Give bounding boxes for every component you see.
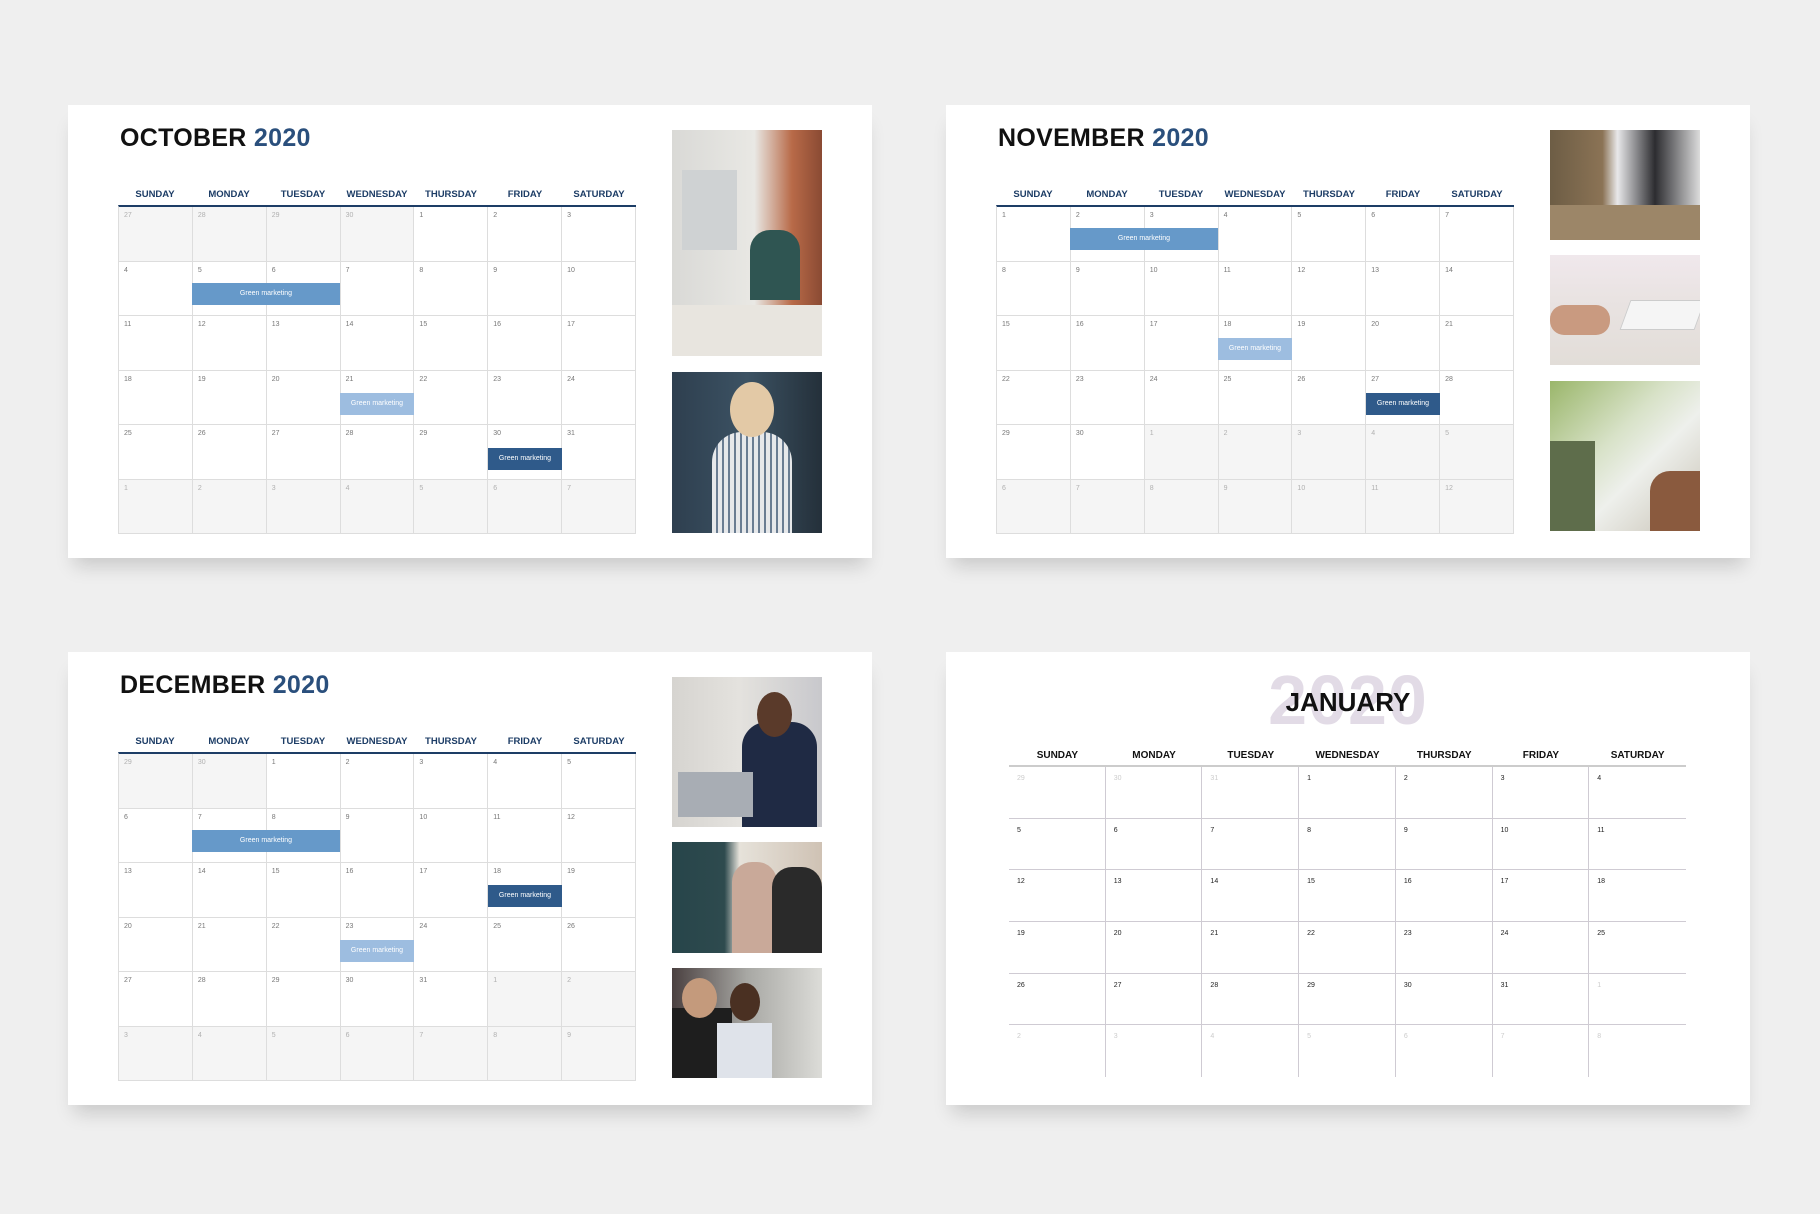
calendar grid: october: 3 — [567, 212, 571, 219]
calendar grid: november: 8 — [1002, 266, 1006, 274]
calendar grid: january: 18 — [1597, 878, 1605, 885]
event bar: nov 2-3 — [1070, 228, 1218, 250]
day headers — [1013, 189, 1503, 200]
calendar grid: october: 9 — [493, 266, 497, 274]
calendar grid: december: 30 — [198, 759, 206, 766]
calendar grid: november: 9 — [1224, 484, 1227, 492]
calendar grid: october: 20 — [272, 376, 280, 382]
calendar grid: november: 4 — [1224, 212, 1227, 219]
title: january: JANUARY — [1286, 687, 1410, 717]
calendar grid: november: 23 — [1076, 376, 1084, 382]
calendar grid: december: 24 — [419, 922, 427, 930]
calendar grid: november: 10 — [1297, 484, 1305, 492]
calendar grid: november: 12 — [1297, 266, 1305, 274]
calendar grid: october: 25 — [124, 430, 132, 437]
calendar grid: january: 26 — [1017, 982, 1025, 989]
calendar grid: november: 6 — [1371, 212, 1375, 219]
calendar grid: january: 2 — [1404, 775, 1408, 782]
event bar: dec 23: Green marketing — [351, 947, 403, 954]
photo: hands on keyboard — [1550, 255, 1700, 365]
day headers: SATURDAY — [1451, 189, 1503, 200]
calendar grid: december: 21 — [198, 922, 206, 930]
day headers: TUESDAY — [1227, 750, 1274, 761]
calendar grid: january: 30 — [1114, 775, 1122, 782]
calendar grid: december: 29 — [124, 759, 132, 766]
calendar grid: january: 7 — [1210, 827, 1214, 834]
day headers: FRIDAY — [1386, 189, 1420, 200]
calendar grid: november: 28 — [1445, 376, 1453, 382]
calendar grid: october: 6 — [272, 266, 276, 274]
calendar grid: october: 14 — [346, 321, 353, 328]
calendar grid: december: 25 — [493, 922, 501, 930]
day headers: WEDNESDAY — [347, 736, 407, 747]
calendar grid: november: 20 — [1371, 321, 1379, 328]
calendar grid: january — [1009, 765, 1686, 1077]
event bar: oct 30: Green marketing — [499, 455, 551, 462]
calendar grid: january: 11 — [1597, 827, 1605, 834]
calendar grid: november: 9 — [1076, 266, 1080, 274]
calendar grid: november: 26 — [1297, 376, 1305, 382]
calendar grid: december: 15 — [272, 868, 280, 875]
panel: december 2020 — [68, 652, 872, 1105]
day headers: SUNDAY — [1037, 750, 1078, 761]
calendar grid: december: 19 — [567, 868, 575, 875]
day headers: TUESDAY — [281, 736, 325, 747]
day headers: SATURDAY — [573, 189, 625, 200]
calendar grid: december: 4 — [493, 759, 497, 766]
calendar grid: december: 29 — [272, 977, 280, 984]
day headers: THURSDAY — [1303, 189, 1355, 200]
calendar grid: january: 1 — [1597, 982, 1601, 989]
day headers: THURSDAY — [425, 736, 477, 747]
calendar grid: december: 20 — [124, 922, 132, 930]
calendar grid: october: 4 — [124, 266, 128, 274]
day headers: WEDNESDAY — [1315, 750, 1380, 761]
calendar grid: january: 29 — [1307, 982, 1315, 989]
calendar grid: october: 28 — [198, 212, 206, 219]
photo: woman in striped shirt — [672, 372, 822, 533]
calendar grid: november — [996, 205, 1514, 534]
calendar grid: january: 31 — [1210, 775, 1218, 782]
calendar grid: january: 28 — [1210, 982, 1218, 989]
day headers: MONDAY — [1132, 750, 1176, 761]
calendar grid: october: 2 — [493, 212, 497, 219]
calendar grid: november: 6 — [1002, 484, 1006, 492]
calendar grid: november: 3 — [1150, 212, 1154, 219]
calendar grid: january: 21 — [1210, 930, 1218, 937]
calendar grid: december: 8 — [272, 814, 276, 820]
event bar: oct 5-6 — [192, 283, 340, 305]
calendar grid: january: 12 — [1017, 878, 1025, 885]
calendar grid: october: 27 — [124, 212, 132, 219]
calendar grid: december: 6 — [124, 814, 128, 820]
calendar grid: january: 14 — [1210, 878, 1218, 885]
calendar grid: october: 1 — [124, 484, 128, 492]
calendar grid: december: 9 — [567, 1032, 571, 1038]
calendar grid: december: 2 — [567, 977, 571, 984]
calendar grid: october: 2 — [198, 484, 202, 492]
calendar grid: december: 26 — [567, 922, 575, 930]
calendar grid: november: 21 — [1445, 321, 1453, 328]
calendar grid: october: 15 — [419, 321, 427, 328]
calendar grid: december: 30 — [346, 977, 353, 984]
calendar grid: november: 25 — [1224, 376, 1231, 382]
calendar grid: december: 28 — [198, 977, 206, 984]
panel: october 2020 — [68, 105, 872, 558]
photo: man at desk — [1550, 130, 1700, 240]
calendar grid: november: 19 — [1297, 321, 1305, 328]
title: 2020 background: 2020 — [1268, 661, 1428, 739]
calendar grid: october: 23 — [493, 376, 501, 382]
event bar: oct 21 — [340, 393, 414, 415]
calendar grid: november: 7 — [1076, 484, 1080, 492]
calendar grid: october — [118, 205, 636, 534]
calendar grid: december: 23 — [346, 922, 353, 930]
calendar grid: november: 5 — [1445, 430, 1449, 437]
calendar grid: january: 19 — [1017, 930, 1025, 937]
calendar grid: december: 16 — [346, 868, 353, 875]
calendar grid: january: 5 — [1017, 827, 1021, 834]
calendar grid: december: 2 — [346, 759, 349, 766]
photo: woman with laptop — [672, 677, 822, 827]
calendar grid: january: 15 — [1307, 878, 1315, 885]
calendar grid: january: 6 — [1404, 1033, 1408, 1040]
event bar: dec 18 — [488, 885, 562, 907]
calendar grid: october: 30 — [346, 212, 353, 219]
event bar: nov 27: Green marketing — [1377, 400, 1429, 407]
event bar: dec 18: Green marketing — [499, 892, 551, 899]
day headers — [1037, 750, 1665, 761]
calendar grid: january: 6 — [1114, 827, 1118, 834]
calendar grid: december: 6 — [346, 1032, 349, 1038]
calendar grid: december: 3 — [419, 759, 423, 766]
calendar grid: october: 8 — [419, 266, 423, 274]
event bar: dec 7-8 — [192, 830, 340, 852]
day headers: SUNDAY — [135, 189, 175, 200]
calendar grid: october: 30 — [493, 430, 501, 437]
day headers: FRIDAY — [508, 736, 542, 747]
title: october: OCTOBER 2020 — [120, 124, 311, 152]
calendar grid: january: 4 — [1210, 1033, 1214, 1040]
calendar grid: january: 17 — [1501, 878, 1508, 885]
calendar grid: november: 27 — [1371, 376, 1379, 382]
calendar grid: december: 12 — [567, 814, 575, 820]
calendar grid: november: 11 — [1224, 266, 1231, 274]
calendar grid: november: 14 — [1445, 266, 1453, 274]
calendar grid: october: 19 — [198, 376, 206, 382]
panel: november 2020 — [946, 105, 1750, 558]
calendar grid: december: 3 — [124, 1032, 128, 1038]
day headers — [135, 189, 625, 200]
calendar grid: january: 29 — [1017, 775, 1025, 782]
event bar: oct 30 — [488, 448, 562, 470]
day headers — [135, 736, 625, 747]
calendar grid: january: 25 — [1597, 930, 1605, 937]
calendar grid: october: 21 — [346, 376, 353, 382]
day headers: MONDAY — [1086, 189, 1128, 200]
calendar grid: january: 16 — [1404, 878, 1412, 885]
calendar grid: january: 27 — [1114, 982, 1122, 989]
day headers: THURSDAY — [425, 189, 477, 200]
calendar grid: november: 5 — [1297, 212, 1301, 219]
photo: woman at computer — [672, 130, 822, 356]
calendar grid: november: 2 — [1224, 430, 1227, 437]
event bar: nov 18: Green marketing — [1229, 345, 1281, 352]
calendar grid: december: 8 — [493, 1032, 497, 1038]
calendar grid: october: 29 — [272, 212, 280, 219]
calendar grid: december: 11 — [493, 814, 501, 820]
calendar grid: december: 27 — [124, 977, 132, 984]
photo: two men smiling — [672, 968, 822, 1078]
calendar grid: november: 3 — [1297, 430, 1301, 437]
calendar grid: january: 8 — [1597, 1033, 1601, 1040]
calendar grid: january: 5 — [1307, 1033, 1311, 1040]
calendar grid: january: 23 — [1404, 930, 1412, 937]
calendar grid: december: 7 — [419, 1032, 423, 1038]
day headers: FRIDAY — [508, 189, 542, 200]
day headers: FRIDAY — [1523, 750, 1559, 761]
calendar grid: january: 13 — [1114, 878, 1122, 885]
calendar grid: november: 11 — [1371, 484, 1379, 492]
calendar grid: december: 1 — [272, 759, 276, 766]
calendar grid: november: 22 — [1002, 376, 1010, 382]
calendar grid: january: 10 — [1501, 827, 1508, 834]
day headers: TUESDAY — [281, 189, 325, 200]
calendar grid: january: 31 — [1501, 982, 1508, 989]
calendar grid: october: 10 — [567, 266, 575, 274]
calendar grid: november: 17 — [1150, 321, 1158, 328]
event bar: nov 2-3: Green marketing — [1118, 235, 1170, 242]
calendar grid: october: 28 — [346, 430, 353, 437]
calendar grid: january: 22 — [1307, 930, 1315, 937]
calendar grid: october: 22 — [419, 376, 427, 382]
calendar grid: december: 9 — [346, 814, 349, 820]
calendar grid: november: 18 — [1224, 321, 1231, 328]
calendar grid: december: 5 — [272, 1032, 276, 1038]
calendar grid: october: 7 — [567, 484, 571, 492]
calendar grid: december: 4 — [198, 1032, 202, 1038]
calendar grid: december: 7 — [198, 814, 202, 820]
calendar grid: november: 2 — [1076, 212, 1080, 219]
calendar grid: october: 27 — [272, 430, 280, 437]
day headers: MONDAY — [208, 736, 250, 747]
event bar: oct 5-6: Green marketing — [240, 290, 292, 297]
calendar grid: november: 12 — [1445, 484, 1453, 492]
calendar grid: october: 12 — [198, 321, 206, 328]
calendar grid: december: 1 — [493, 977, 497, 984]
event bar: dec 7-8: Green marketing — [240, 837, 292, 844]
calendar grid: december: 31 — [419, 977, 427, 984]
calendar grid: december: 22 — [272, 922, 280, 930]
day headers: WEDNESDAY — [347, 189, 407, 200]
event bar: nov 27 — [1366, 393, 1440, 415]
calendar grid: october: 16 — [493, 321, 501, 328]
calendar grid: october: 6 — [493, 484, 497, 492]
calendar grid: november: 29 — [1002, 430, 1010, 437]
calendar grid: october: 5 — [419, 484, 423, 492]
panel: january — [946, 652, 1750, 1105]
calendar grid: january: 3 — [1114, 1033, 1118, 1040]
day headers: MONDAY — [208, 189, 250, 200]
calendar grid: november: 24 — [1150, 376, 1158, 382]
title: december: DECEMBER 2020 — [120, 671, 330, 699]
calendar grid: january: 4 — [1597, 775, 1601, 782]
calendar grid: october: 26 — [198, 430, 206, 437]
day headers: TUESDAY — [1159, 189, 1203, 200]
calendar grid: december: 17 — [419, 868, 427, 875]
event bar: dec 23 — [340, 940, 414, 962]
calendar grid: october: 31 — [567, 430, 575, 437]
calendar grid: december: 14 — [198, 868, 206, 875]
calendar grid: november: 1 — [1002, 212, 1006, 219]
photo: two colleagues — [672, 842, 822, 953]
calendar grid: december: 18 — [493, 868, 501, 875]
calendar grid: january: 20 — [1114, 930, 1122, 937]
calendar grid: january: 1 — [1307, 775, 1311, 782]
calendar grid: december — [118, 752, 636, 1081]
calendar grid: january: 7 — [1501, 1033, 1504, 1040]
calendar grid: october: 5 — [198, 266, 202, 274]
calendar grid: november: 7 — [1445, 212, 1449, 219]
calendar grid: october: 13 — [272, 321, 280, 328]
day headers: SUNDAY — [135, 736, 175, 747]
calendar grid: november: 1 — [1150, 430, 1154, 437]
event bar: nov 18 — [1218, 338, 1292, 360]
day headers: SATURDAY — [1611, 750, 1665, 761]
calendar grid: november: 30 — [1076, 430, 1084, 437]
calendar grid: december: 10 — [419, 814, 427, 820]
calendar grid: january: 8 — [1307, 827, 1311, 834]
calendar grid: october: 17 — [567, 321, 575, 328]
calendar grid: january: 3 — [1501, 775, 1504, 782]
calendar grid: october: 7 — [346, 266, 349, 274]
title: november: NOVEMBER 2020 — [998, 124, 1209, 152]
calendar grid: january: 2 — [1017, 1033, 1021, 1040]
calendar grid: november: 8 — [1150, 484, 1154, 492]
calendar grid: october: 29 — [419, 430, 427, 437]
calendar grid: january: 30 — [1404, 982, 1412, 989]
calendar grid: november: 15 — [1002, 321, 1010, 328]
day headers: SUNDAY — [1013, 189, 1053, 200]
calendar grid: november: 16 — [1076, 321, 1084, 328]
calendar grid: october: 1 — [419, 212, 423, 219]
calendar grid: october: 18 — [124, 376, 132, 382]
calendar grid: january: 24 — [1501, 930, 1508, 937]
calendar grid: november: 13 — [1371, 266, 1379, 274]
calendar grid: december: 5 — [567, 759, 571, 766]
calendar grid: october: 24 — [567, 376, 575, 382]
day headers: SATURDAY — [573, 736, 625, 747]
event bar: oct 21: Green marketing — [351, 400, 403, 407]
calendar grid: december: 13 — [124, 868, 132, 875]
day headers: WEDNESDAY — [1225, 189, 1285, 200]
calendar grid: october: 4 — [346, 484, 349, 492]
calendar grid: october: 11 — [124, 321, 131, 328]
calendar grid: november: 4 — [1371, 430, 1375, 437]
photo: tablet and phone — [1550, 381, 1700, 531]
calendar grid: january: 9 — [1404, 827, 1408, 834]
calendar grid: october: 3 — [272, 484, 276, 492]
day headers: THURSDAY — [1417, 750, 1472, 761]
calendar grid: november: 10 — [1150, 266, 1158, 274]
